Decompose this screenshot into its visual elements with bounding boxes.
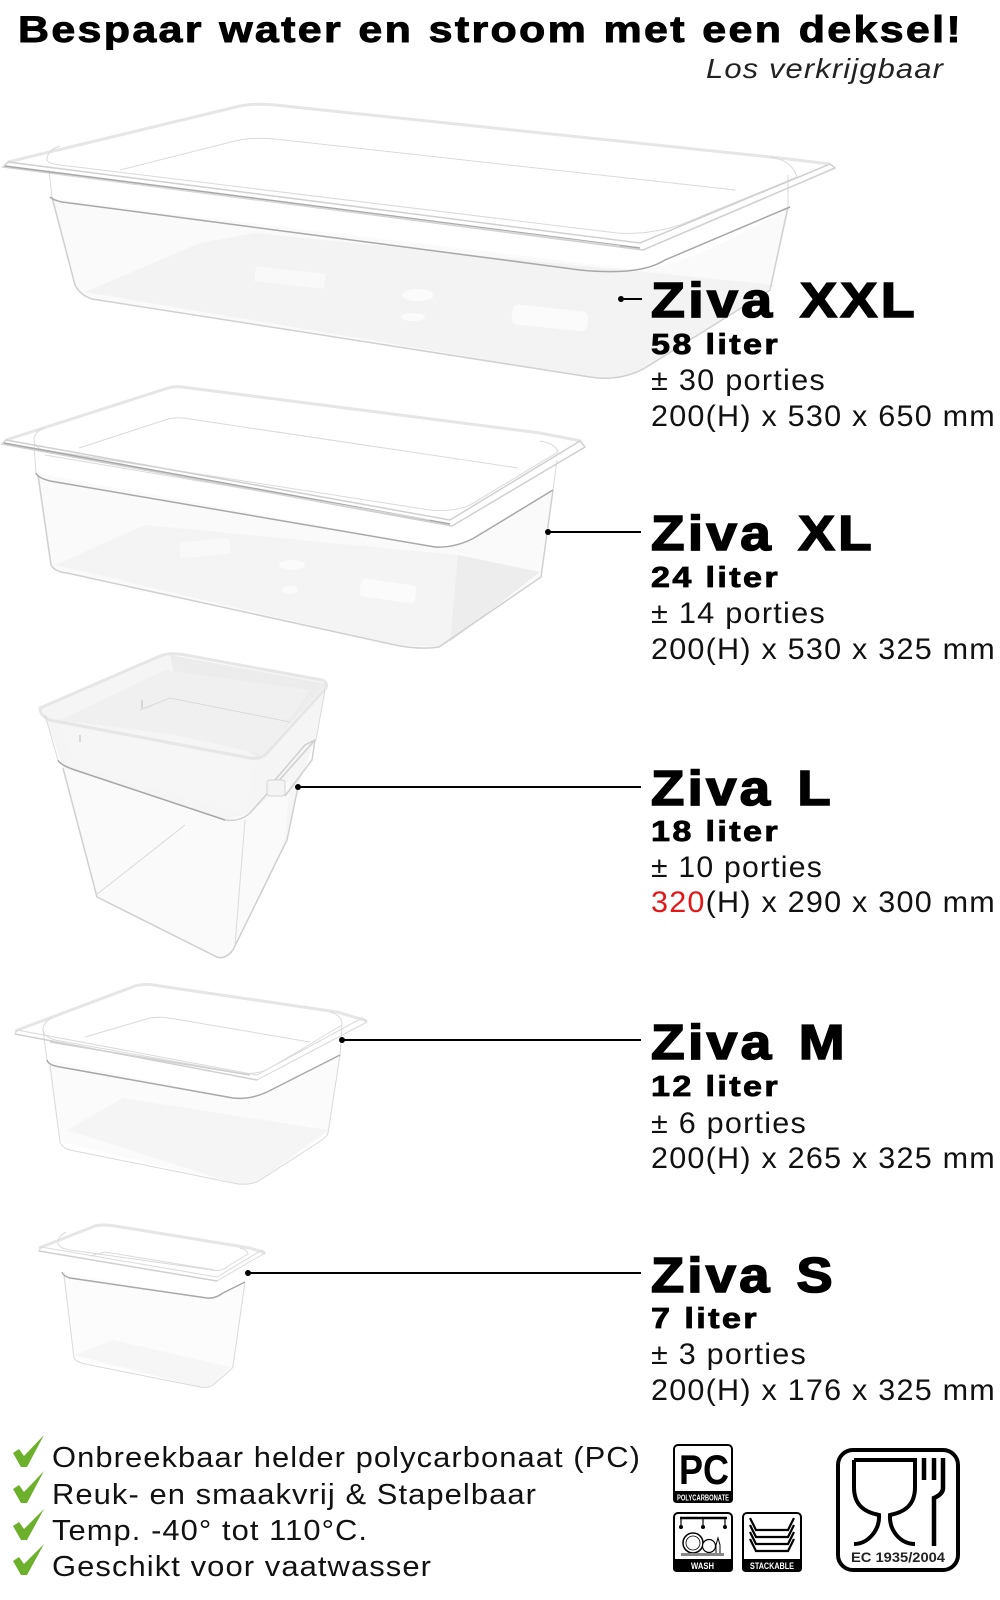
container illustration: M [15,984,367,1184]
subtitle: Los verkrijgbaar [706,53,945,84]
panel: Ziva L [40,654,996,958]
label: Ziva XXL: Ziva XXL [651,274,918,328]
portions: 10: ± 10 porties [651,851,823,884]
callout line: XL [545,529,641,535]
portions: 3: ± 3 porties [651,1338,807,1371]
container illustration: XL [2,387,585,648]
icon: check 3 [13,1509,44,1540]
dimensions: XXL: 200(H) x 530 x 650 mm [651,400,996,433]
label: Ziva L: Ziva L [651,762,834,816]
callout line: L [295,784,641,790]
portions: 6: ± 6 porties [651,1107,807,1140]
icon: check 1 [13,1435,44,1467]
portions: 14: ± 14 porties [651,597,826,630]
callout line: M [339,1037,641,1043]
container illustration: S [39,1225,265,1388]
volume: 7 liter: 7 liter [651,1303,759,1335]
feature 1: Onbreekbaar helder polycarbonaat (PC) [52,1442,641,1474]
icon: check 2 [13,1471,44,1503]
volume: 18 liter: 18 liter [651,816,780,848]
title: Bespaar water en stroom met een deksel! [18,9,963,50]
icon: PC polycarbonate [673,1445,733,1503]
callout line: S [245,1270,641,1276]
feature 3: Temp. -40° tot 110°C. [52,1515,368,1547]
dimensions: XL: 200(H) x 530 x 325 mm [651,633,996,666]
icon: stackable [742,1513,802,1572]
volume: 24 liter: 24 liter [651,562,780,594]
icon: dishwasher safe [673,1513,733,1572]
panel: Ziva XXL [3,104,996,433]
panel: Ziva S [39,1225,996,1407]
volume: 58 liter: 58 liter [651,329,780,361]
icon: food safe EC 1935/2004 [838,1450,958,1570]
feature 4: Geschikt voor vaatwasser [52,1551,432,1583]
portions: 30: ± 30 porties [651,364,826,397]
container illustration: XXL [3,104,835,378]
container illustration: L [40,654,327,958]
feature 2: Reuk- en smaakvrij & Stapelbaar [52,1479,537,1511]
icon: food safe EC 1935/2004: EC 1935/2004 [851,1549,945,1565]
label: Ziva XL: Ziva XL [651,507,875,561]
dimensions: M: 200(H) x 265 x 325 mm [651,1142,996,1175]
icon: check 4 [13,1544,44,1575]
dimensions: L: 320(H) x 290 x 300 mm [651,886,996,919]
panel: Ziva M [15,984,996,1184]
icon: PC polycarbonate: PC [679,1446,729,1493]
icon: PC polycarbonate: POLYCARBONATE [677,1494,729,1502]
icon: dishwasher safe: WASH [691,1561,714,1572]
volume: 12 liter: 12 liter [651,1071,780,1103]
label: Ziva M: Ziva M [651,1016,848,1070]
features list [13,1435,641,1583]
label: Ziva S: Ziva S [651,1249,836,1303]
panel: Ziva XL [2,387,996,666]
callout line: XXL [618,296,642,302]
icon: stackable: STACKABLE [750,1561,794,1572]
dimensions: S: 200(H) x 176 x 325 mm [651,1374,996,1407]
